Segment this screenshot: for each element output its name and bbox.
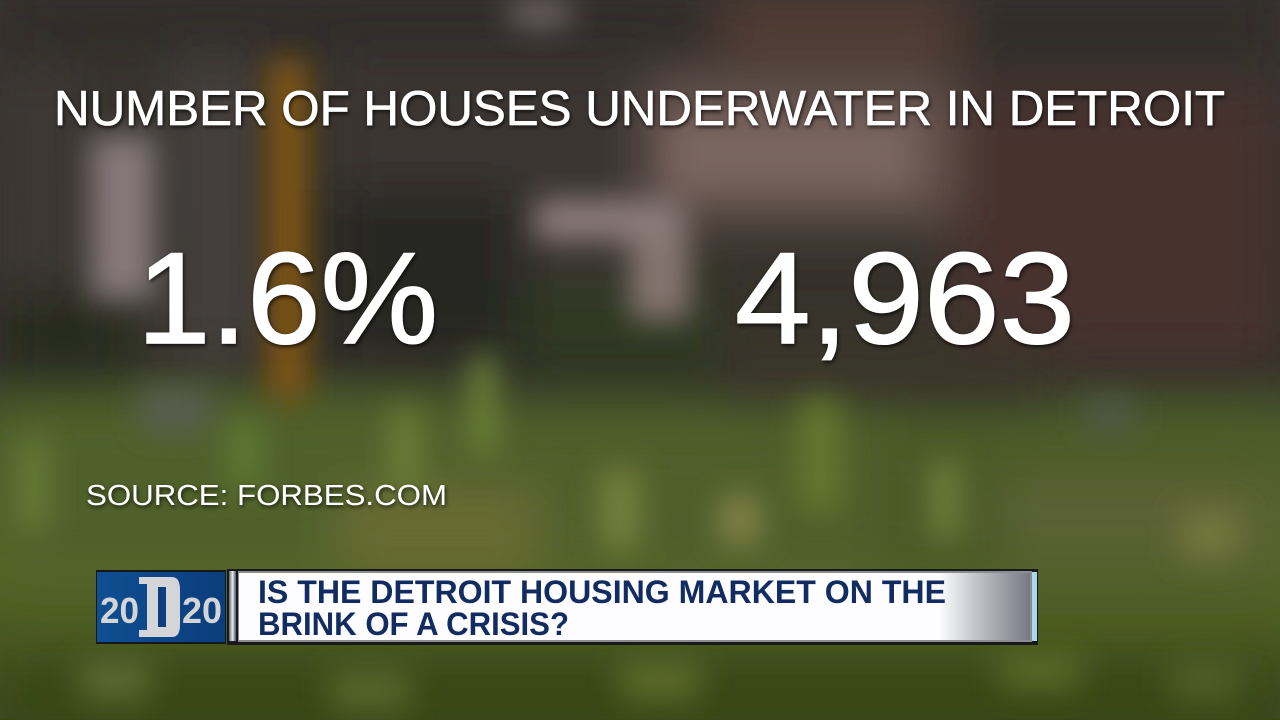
headline text: BRINK OF A CRISIS? [258, 606, 569, 642]
headline text: IS THE DETROIT HOUSING MARKET ON THE [258, 574, 946, 610]
logo: 2020 D: 20 [100, 590, 139, 631]
statistic: house count: 4,963 [735, 225, 1075, 371]
title: NUMBER OF HOUSES UNDERWATER IN DETROIT [54, 82, 1225, 136]
headline text [258, 574, 946, 642]
logo: 2020 D [96, 570, 226, 644]
headline bar [227, 569, 1038, 645]
statistic: percent underwater: 1.6% [137, 225, 438, 371]
logo: 2020 D: 20 [182, 590, 222, 631]
lower third banner [96, 569, 1038, 645]
source note: SOURCE: FORBES.COM [86, 480, 447, 512]
